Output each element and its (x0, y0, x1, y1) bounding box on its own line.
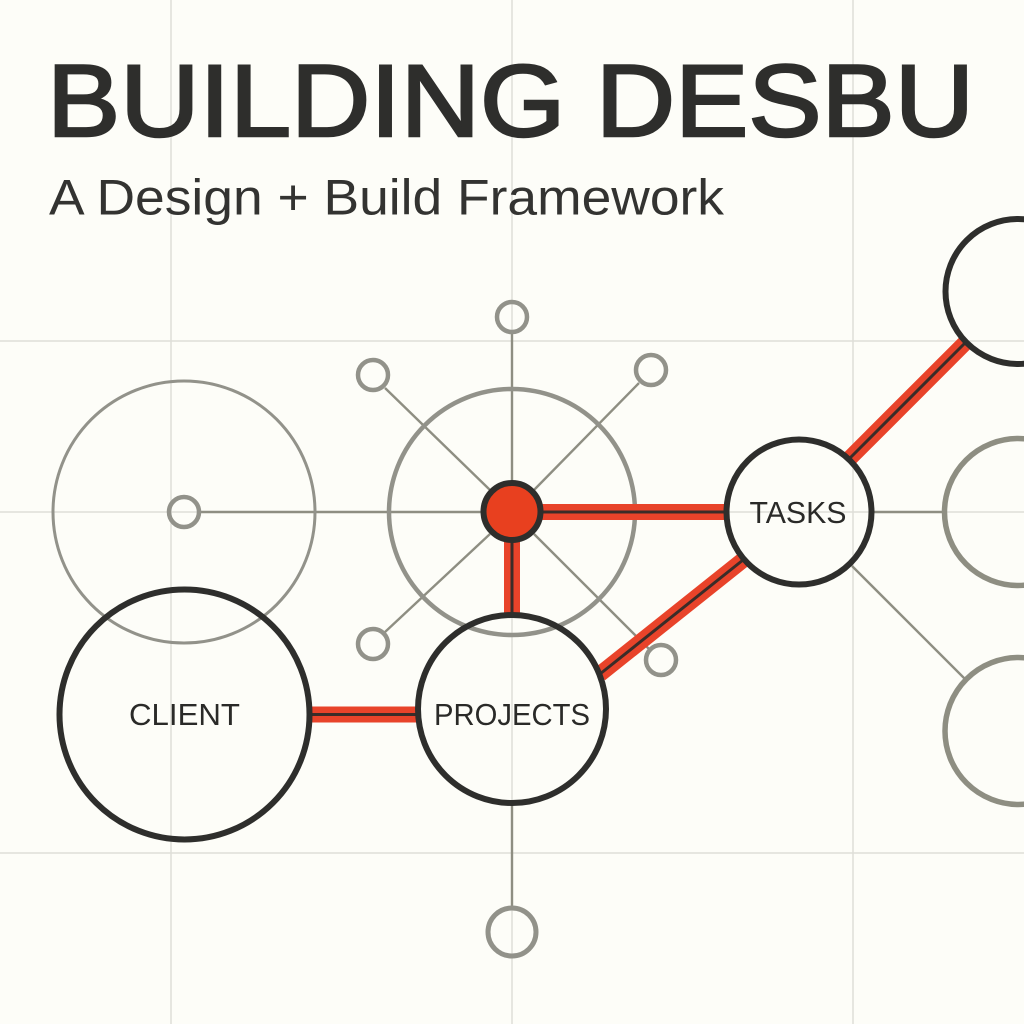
node: top right (946, 219, 1024, 364)
node: tasks (726, 440, 872, 584)
node: client: CLIENT (129, 697, 240, 732)
node: tasks: TASKS (750, 495, 846, 530)
grey ring: right lower (945, 658, 1024, 804)
small node: upper right (636, 355, 666, 385)
thin connector lines (200, 332, 965, 907)
title: BUILDING DESBU (47, 44, 974, 158)
small node: lower left (358, 629, 388, 659)
small node: upper left (358, 360, 388, 390)
node: projects: PROJECTS (434, 697, 590, 732)
node: projects (418, 615, 606, 803)
red connectors (310, 342, 966, 714)
node: client (60, 590, 310, 840)
subtitle: A Design + Build Framework (49, 170, 725, 226)
grey ring: right middle (944, 438, 1024, 586)
grey ring: left large (53, 381, 315, 643)
small node: left (169, 497, 199, 527)
hub node (484, 483, 540, 540)
small node: lower right (646, 645, 676, 675)
small node: top (497, 302, 527, 332)
grey ring: centre large (389, 389, 635, 635)
small node: bottom (488, 908, 536, 956)
